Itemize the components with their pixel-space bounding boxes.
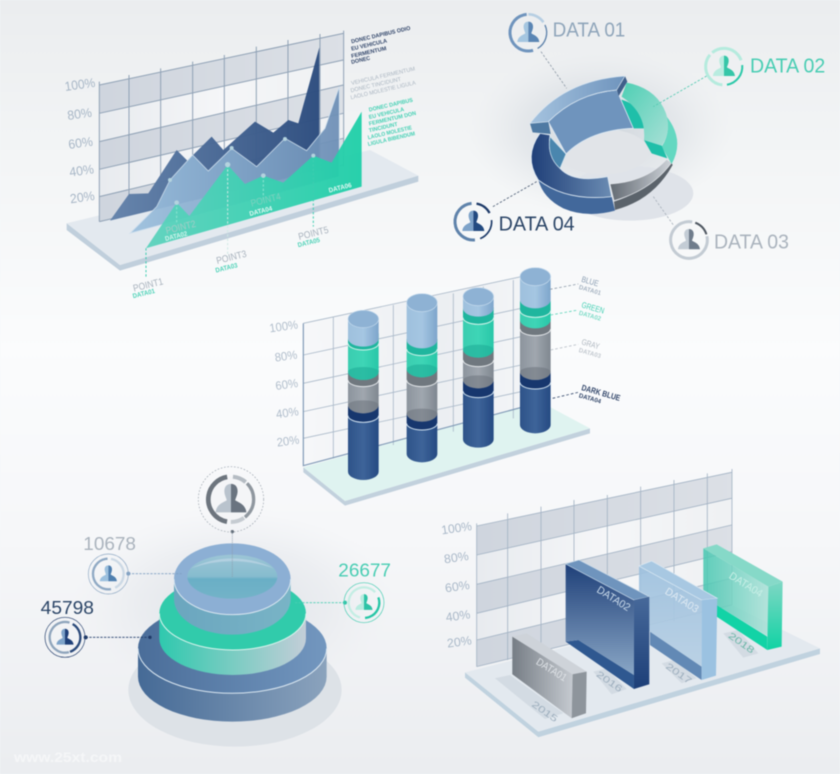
grid wall xyxy=(477,469,732,667)
text block green xyxy=(367,98,417,148)
axis labels: 60% xyxy=(274,376,299,393)
icon: data 04 xyxy=(452,200,495,243)
axis labels: 60% xyxy=(444,578,471,595)
ring hole xyxy=(558,129,648,174)
year pads xyxy=(495,630,758,719)
year labels: 2017 xyxy=(664,661,694,686)
axis labels: 40% xyxy=(445,607,471,625)
point labels: POINT4 xyxy=(250,191,283,210)
axis labels: 20% xyxy=(446,633,473,651)
point labels: DATA02 xyxy=(164,231,188,243)
text block green: TINCIDUNT xyxy=(368,122,399,134)
light blue area xyxy=(130,87,339,233)
leader lines xyxy=(492,52,707,225)
axis labels: 80% xyxy=(443,549,470,566)
cylinder 1 xyxy=(348,310,379,480)
text block gray: DONEC TINCIDUNT xyxy=(350,77,402,94)
text block gray xyxy=(350,66,417,101)
icon: data 01 xyxy=(504,8,553,57)
legend: dark blue: DARK BLUE xyxy=(580,382,622,403)
top inset xyxy=(187,555,277,599)
bar chart panel xyxy=(440,469,820,737)
green area xyxy=(146,112,362,248)
tier: middle xyxy=(159,577,306,675)
soft shadow xyxy=(467,50,733,217)
text block navy: DONEC xyxy=(351,56,371,66)
tier: bottom xyxy=(138,603,327,722)
text block green: LAOLO MOLESTIE xyxy=(367,125,413,141)
segment: gray xyxy=(610,159,673,210)
legend: gray: GRAY xyxy=(580,337,601,351)
axis labels: 80% xyxy=(66,105,93,123)
cylinder chart panel xyxy=(268,268,622,506)
soft shadow xyxy=(73,507,393,693)
label: data 03: DATA 03 xyxy=(714,231,789,253)
text block navy: EU VEHICULA xyxy=(351,39,388,53)
point labels: DATA01 xyxy=(132,288,156,300)
point labels: DATA04 xyxy=(249,205,273,218)
icon: data 03 xyxy=(665,216,712,263)
bar: gray 2015: DATA01 xyxy=(534,656,569,684)
axis labels: 100% xyxy=(268,317,299,335)
ground shadow xyxy=(128,633,342,747)
text block navy xyxy=(351,26,412,66)
axis labels: 60% xyxy=(67,134,94,152)
cylinder 3 xyxy=(463,288,494,448)
text block green: LIGULA BIBENDUM xyxy=(367,131,416,148)
year labels xyxy=(530,630,756,724)
segment: dark blue xyxy=(531,133,615,214)
label: data 02: DATA 02 xyxy=(750,56,825,78)
bar: green 2018: DATA04 xyxy=(727,570,765,600)
ring chart panel xyxy=(452,8,825,263)
year labels: 2015 xyxy=(530,699,560,724)
segment: blue xyxy=(530,76,633,154)
bar: gray 2015 xyxy=(512,633,587,718)
axis labels xyxy=(64,75,97,206)
icon: 26677 xyxy=(344,583,384,623)
stacked cylinder pyramid panel xyxy=(41,467,393,747)
legend: blue: BLUE xyxy=(580,274,600,288)
point labels: POINT1 xyxy=(132,276,164,295)
axis labels: 80% xyxy=(274,348,299,365)
leader lines xyxy=(86,532,345,637)
bar: blue 2017: DATA03 xyxy=(663,586,701,616)
axis labels: 40% xyxy=(68,161,95,180)
legend: blue: DATA01 xyxy=(578,284,602,297)
leader dots xyxy=(84,530,347,639)
text block gray: LAOLO MOLESTIE LIGULA xyxy=(350,80,417,101)
segment: green xyxy=(620,83,677,164)
legend: dark blue xyxy=(578,382,622,410)
watermark: www.25xt.com xyxy=(13,749,122,765)
bar: green 2018 xyxy=(703,544,783,650)
value: 45798: 45798 xyxy=(41,597,94,618)
floor slab xyxy=(303,402,590,506)
point labels: POINT5 xyxy=(297,225,330,243)
icon: data 02 xyxy=(698,41,750,92)
icon: top gray xyxy=(198,467,264,532)
year labels: 2016 xyxy=(595,669,624,694)
icon: 10678 xyxy=(88,554,128,594)
bar: navy 2016 xyxy=(566,560,649,689)
text block gray: VEHICULA FERMENTUM xyxy=(351,66,416,87)
value: 10678: 10678 xyxy=(83,533,136,554)
point marker lines xyxy=(146,156,313,278)
year labels: 2018 xyxy=(726,630,756,655)
ground shadow xyxy=(567,166,693,221)
legend: dark blue: DATA04 xyxy=(578,392,602,406)
text block navy: DONEC DAPIBUS ODIO xyxy=(351,26,412,45)
legend leader lines xyxy=(550,284,578,398)
icon: 45798 xyxy=(44,616,86,658)
text block green: EU VEHICULA xyxy=(368,107,405,121)
text block green: DONEC DAPIBUS xyxy=(368,98,414,114)
point labels: DATA06 xyxy=(328,182,353,195)
point markers xyxy=(168,137,315,205)
bar: navy 2016: DATA02 xyxy=(594,584,632,614)
legend: green xyxy=(578,300,606,323)
area chart panel xyxy=(64,26,418,300)
point labels: DATA03 xyxy=(215,262,239,275)
text block navy: FERMENTUM xyxy=(351,46,387,60)
tier: top xyxy=(174,543,291,635)
value: 26677: 26677 xyxy=(338,560,391,581)
dark blue area xyxy=(110,47,319,221)
axis labels: 20% xyxy=(69,188,96,206)
label: data 01: DATA 01 xyxy=(553,20,625,42)
point labels: POINT3 xyxy=(215,249,248,267)
legend: green: DATA02 xyxy=(578,310,602,323)
bar: blue 2017 xyxy=(639,561,717,680)
label: data 04: DATA 04 xyxy=(499,214,575,236)
floor slab xyxy=(67,150,418,271)
axis labels xyxy=(440,519,473,651)
grid wall xyxy=(303,273,537,466)
point labels: POINT2 xyxy=(165,219,197,237)
axis labels xyxy=(268,317,301,450)
axis labels: 40% xyxy=(275,404,300,421)
cylinder 2 xyxy=(407,294,437,462)
grid wall xyxy=(99,31,344,222)
point labels xyxy=(132,182,353,300)
legend: gray xyxy=(578,337,605,360)
axis labels: 100% xyxy=(64,75,97,94)
legend: blue xyxy=(578,274,605,297)
axis labels: 100% xyxy=(440,519,473,537)
legend: gray: DATA03 xyxy=(578,347,602,360)
text block green: FERMENTUM DON xyxy=(368,111,417,128)
point labels: DATA05 xyxy=(297,237,321,249)
legend: green: GREEN xyxy=(580,300,606,316)
floor slab xyxy=(465,605,820,737)
cylinder 4 xyxy=(520,268,551,433)
axis labels: 20% xyxy=(276,433,301,450)
